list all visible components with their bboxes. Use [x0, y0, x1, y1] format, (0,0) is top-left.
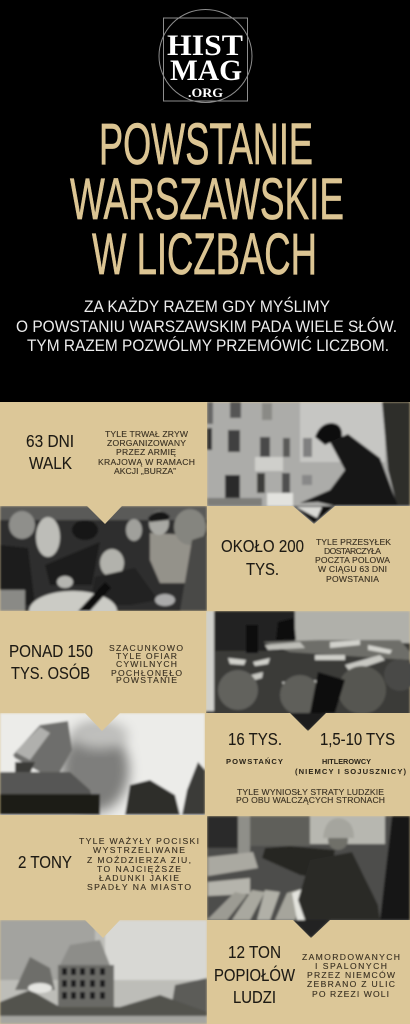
- stat: ponad 150 tys. osób: TYLE OFIAR: [116, 651, 177, 661]
- stat: human losses on both sides: HITLEROWCY: [322, 757, 371, 766]
- stat: 2 tony: TO NAJCIĘŻSZE: [97, 864, 181, 874]
- beige content background: [0, 402, 410, 1024]
- stat: 12 ton popiołów ludzi: POPIOŁÓW: [214, 964, 295, 985]
- stat: ponad 150 tys. osób: [9, 641, 183, 685]
- stat: 12 ton popiołów ludzi: [214, 942, 400, 1007]
- stat: około 200 tys.: POWSTANIA: [326, 574, 379, 584]
- stat: 12 ton popiołów ludzi: ZEBRANO Z ULIC: [307, 979, 395, 989]
- stat: 63 dni walk: KRAJOWĄ W RAMACH: [98, 457, 195, 467]
- stat: 2 tony: Z MOŹDZIERZA ZIU,: [87, 855, 191, 865]
- stat: 12 ton popiołów ludzi: I SPALONYCH: [315, 961, 387, 971]
- stat: 12 ton popiołów ludzi: PRZEZ NIEMCÓW: [307, 970, 396, 980]
- stat: human losses on both sides: PO OBU WALCZĄCYCH STRONACH: [236, 795, 385, 805]
- logo: HIST: [167, 29, 243, 62]
- stat: około 200 tys.: DOSTARCZYŁA: [324, 546, 381, 556]
- stat: human losses on both sides: POWSTAŃCY: [226, 757, 283, 766]
- stat: 63 dni walk: TYLE TRWAŁ ZRYW: [105, 429, 189, 439]
- stat: około 200 tys.: OKOŁO 200: [221, 536, 304, 556]
- stat: około 200 tys.: TYS.: [246, 559, 279, 579]
- stat: ponad 150 tys. osób: SZACUNKOWO: [109, 643, 183, 653]
- stat: ponad 150 tys. osób: PONAD 150: [9, 641, 93, 661]
- stat: 12 ton popiołów ludzi: LUDZI: [233, 987, 276, 1007]
- black header background: [0, 0, 410, 402]
- photo: group of insurgents: [0, 506, 207, 611]
- intro text: ZA KAŻDY RAZEM GDY MYŚLIMY: [84, 297, 330, 316]
- stat: około 200 tys.: POCZTA POLOWA: [315, 555, 390, 565]
- intro text: [16, 297, 397, 355]
- stat: human losses on both sides: 16 TYS.: [228, 729, 282, 749]
- stat: 63 dni walk: ZORGANIZOWANY: [107, 438, 186, 448]
- stat: ponad 150 tys. osób: POWSTANIE: [116, 675, 177, 685]
- stat: 63 dni walk: 63 DNI: [26, 431, 74, 451]
- stat: 63 dni walk: PRZEZ ARMIĘ: [116, 447, 176, 457]
- stat: 2 tony: TYLE WAŻYŁY POCISKI: [79, 836, 199, 846]
- stat: human losses on both sides: [226, 729, 406, 805]
- stat: ponad 150 tys. osób: CYWILNYCH: [116, 659, 177, 669]
- logo: [159, 10, 252, 102]
- stat: human losses on both sides: (NIEMCY I SOJUSZNICY): [295, 767, 406, 776]
- stat: 12 ton popiołów ludzi: 12 TON: [228, 942, 281, 962]
- stat: ponad 150 tys. osób: TYS. OSÓB: [11, 662, 90, 683]
- stat: 12 ton popiołów ludzi: PO RZEZI WOLI: [312, 989, 389, 999]
- photo: ruined building: [0, 920, 207, 1024]
- stat: 2 tony: WYSTRZELIWANE: [93, 845, 185, 855]
- stat: około 200 tys.: TYLE PRZESYŁEK: [316, 537, 391, 547]
- stat: 2 tony: 2 TONY: [18, 852, 72, 872]
- logo: .ORG: [188, 85, 223, 100]
- stat: około 200 tys.: W CIĄGU 63 DNI: [318, 564, 387, 574]
- photo: soldier in front of building: [207, 402, 410, 524]
- stat: 63 dni walk: [26, 429, 195, 476]
- stat: human losses on both sides: 1,5-10 TYS: [320, 729, 395, 749]
- stat: ponad 150 tys. osób: POCHŁONĘŁO: [111, 668, 182, 678]
- stat: 2 tony: [18, 836, 199, 892]
- stat: 2 tony: SPADŁY NA MIASTO: [87, 882, 191, 892]
- photo: surrendering soldiers with raised hands: [206, 611, 410, 731]
- stat: 63 dni walk: WALK: [29, 453, 72, 473]
- logo: MAG: [170, 54, 242, 87]
- title: [70, 112, 344, 287]
- photo: German soldier with shells: [207, 816, 410, 938]
- stat: około 200 tys.: [221, 536, 391, 584]
- stat: 63 dni walk: AKCJI „BURZA”: [114, 466, 176, 476]
- stat: 12 ton popiołów ludzi: ZAMORDOWANYCH: [302, 952, 400, 962]
- photo: Karl mortar firing: [0, 713, 205, 815]
- stat: human losses on both sides: TYLE WYNIOSŁY STRATY LUDZKIE: [237, 787, 384, 797]
- stat: 2 tony: ŁADUNKI JAKIE: [99, 873, 179, 883]
